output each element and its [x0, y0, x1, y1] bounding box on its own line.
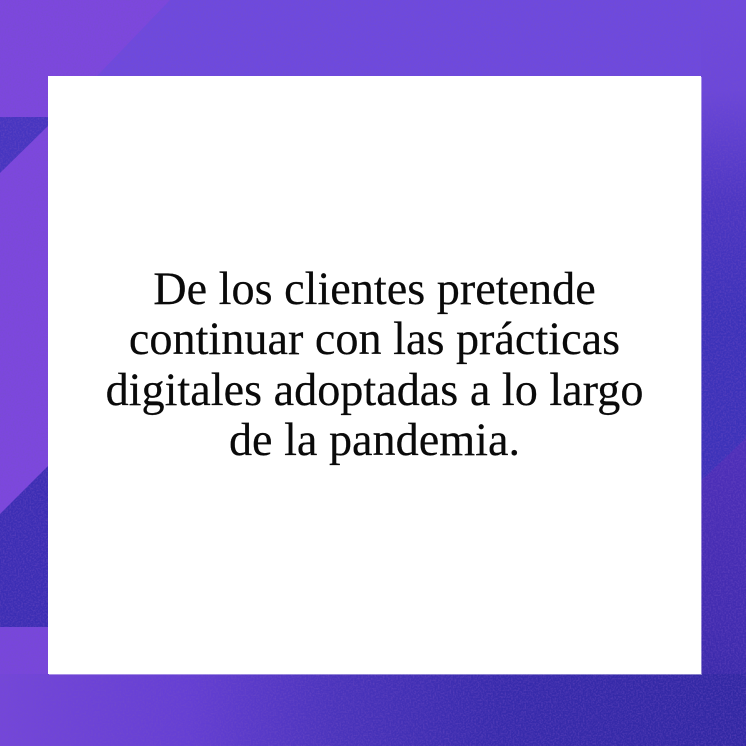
shape: right lower purple area	[701, 438, 746, 746]
shape: right side blue panel	[701, 0, 746, 481]
text block: statement	[106, 263, 643, 466]
shape: light left panel	[0, 0, 176, 674]
text block: statement: de la pandemia.	[229, 414, 520, 465]
text block: statement: continuar con las prácticas	[129, 313, 620, 364]
shape: bottom band	[0, 674, 746, 746]
text block: statement: De los clientes pretende	[153, 263, 596, 314]
white card	[48, 76, 701, 674]
shape: left lower dark block	[0, 466, 48, 627]
text block: statement: digitales adoptadas a lo largo	[106, 364, 643, 415]
shape: left lower light strip	[0, 627, 48, 674]
shape: top band	[97, 0, 746, 76]
shape: left upper dark triangle	[0, 117, 48, 173]
